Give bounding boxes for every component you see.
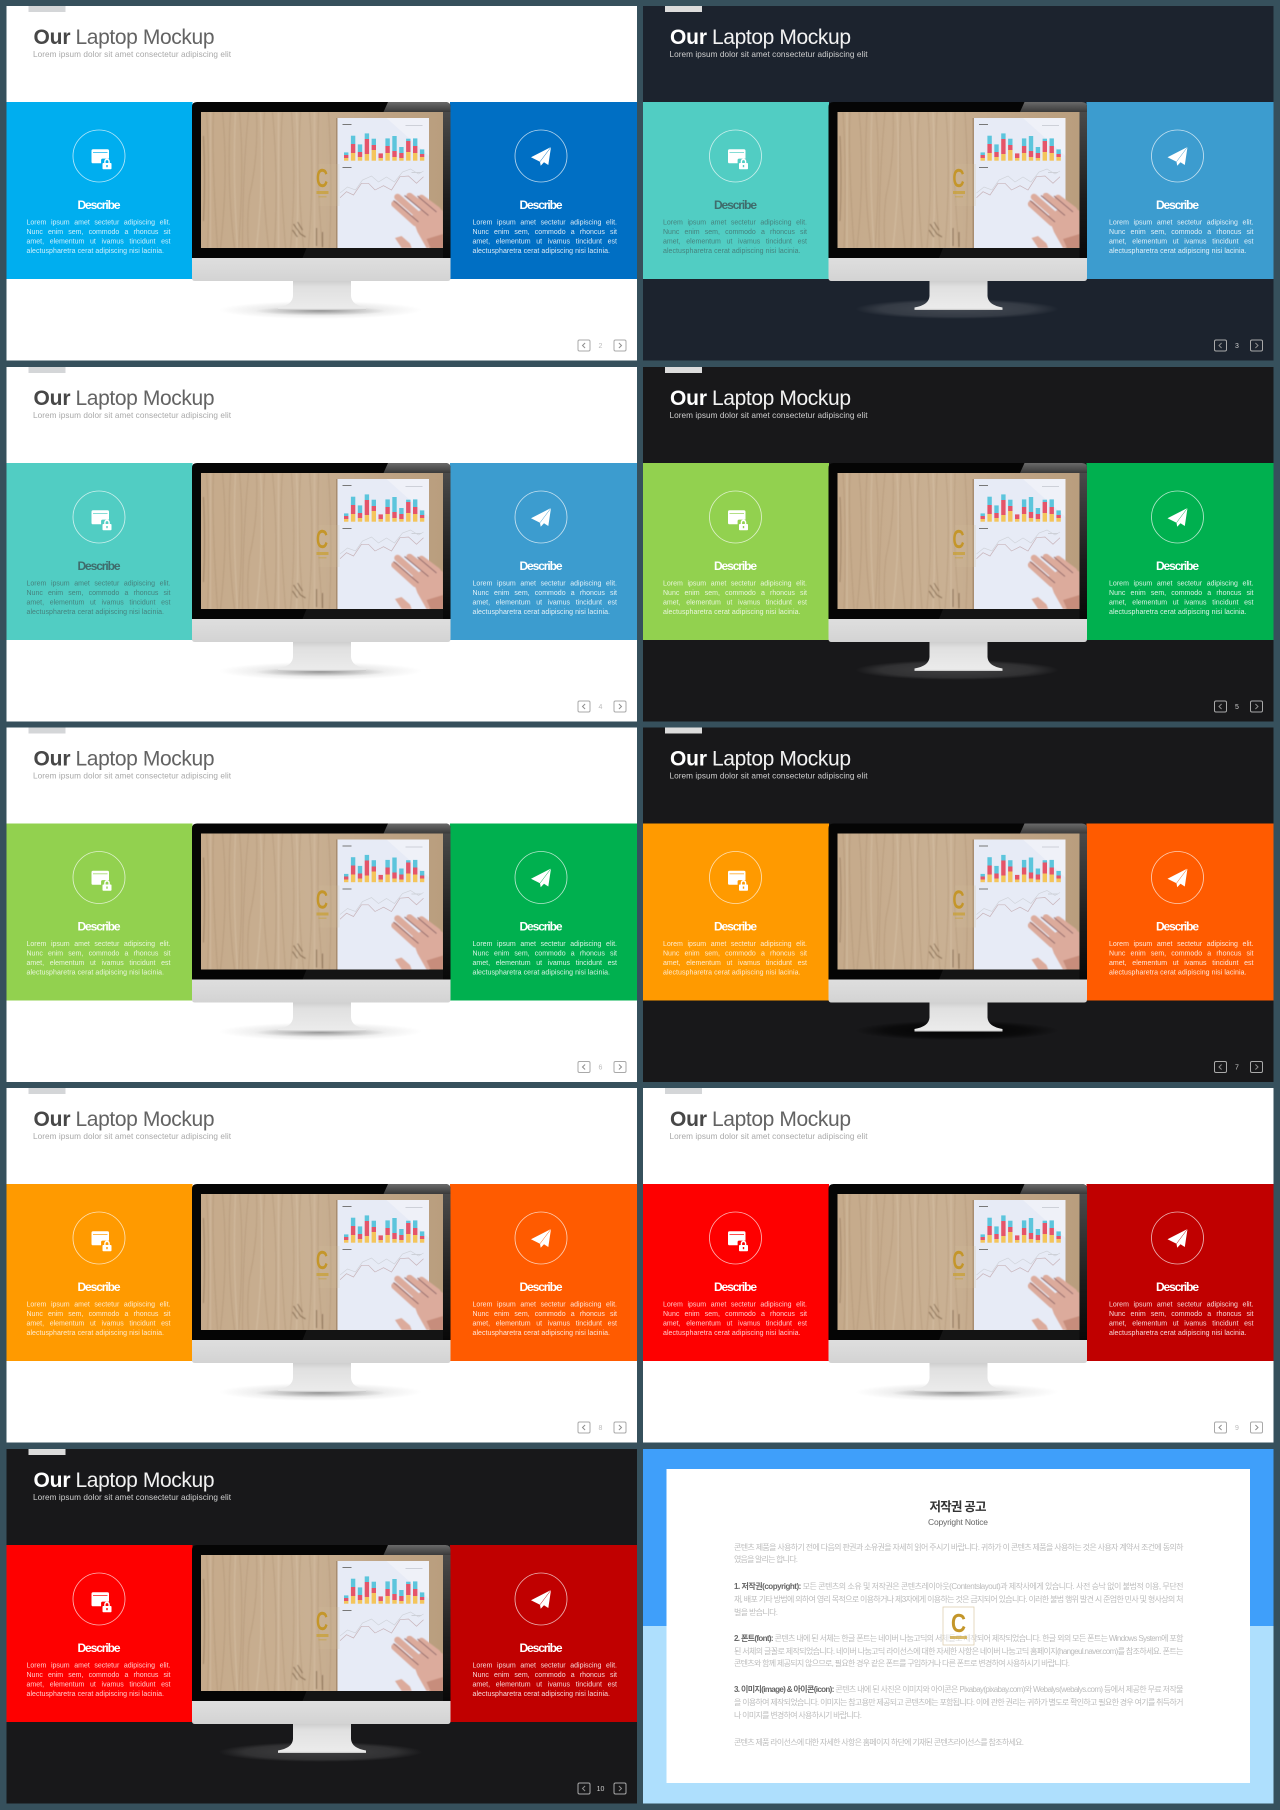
text block: right: alectuspharetra cerat adipiscing nisi lacinia.: [472, 248, 610, 255]
heading: right: Describe: [1156, 1280, 1199, 1294]
text block: right: amet, elementum ut ivamus tincidunt est: [1109, 238, 1254, 246]
text block: right: [1109, 941, 1254, 976]
heading: right: Describe: [520, 920, 563, 934]
text block: left: alectuspharetra cerat adipiscing nisi lacinia.: [663, 970, 801, 976]
text block: right: [472, 1662, 617, 1698]
panel: right: [450, 102, 637, 279]
heading: right: Describe: [1156, 920, 1199, 934]
text block: right: amet, elementum ut ivamus tincidunt est: [472, 1682, 617, 1688]
text block: left: Lorem ipsum amet sectetur adipiscing elit.: [26, 1662, 171, 1670]
text block: right: Lorem ipsum amet sectetur adipiscing elit.: [1109, 941, 1254, 948]
panel: right: [450, 463, 637, 640]
watermark: gold C: [943, 1607, 974, 1645]
title: Laptop Mockup: [712, 748, 851, 770]
panel: left: [6, 824, 192, 1000]
text block: right: amet, elementum ut ivamus tincidunt est: [1109, 1320, 1254, 1328]
pager: [1214, 701, 1262, 712]
text block: section 3 image and icon: 을 이용하여 제작되었습니다. 이미지는 참고용만 제공되고 콘텐츠에는 포함됩니다. 이에 관한 권리는 귀하가 별도로 확인하고 필요한 경우 여기를 취득하거: [734, 1697, 1184, 1707]
text block: left: Lorem ipsum amet sectetur adipiscing elit.: [26, 220, 171, 226]
text block: section 1 copyright: 벌을 받습니다.: [734, 1607, 778, 1617]
text block: right: [472, 220, 617, 255]
text block: section 1 copyright: 재, 배포 기타 방법에 의하여 영리 목적으로 이용하거나 제3자에게 이용하는 것은 금지되어 있습니다. 이러한 불법 행위 발견 시 준엄한 민사 및 형사상의 처: [734, 1594, 1184, 1604]
text block: intro: 였음을 알리는 합니다.: [734, 1554, 798, 1564]
top tab: [28, 367, 66, 373]
pager: 3: [1235, 343, 1239, 350]
monitor mockup: [192, 102, 450, 319]
text block: right: [472, 1302, 617, 1337]
text block: right: Nunc enim sem, commodo a rhoncus sit: [472, 1311, 617, 1318]
panel: left: [6, 463, 192, 640]
text block: left: amet, elementum ut ivamus tincidunt est: [663, 238, 807, 246]
text block: left: alectuspharetra cerat adipiscing nisi lacinia.: [26, 609, 164, 616]
icon: circle with paper plane: [1152, 852, 1204, 904]
icon: circle with paper plane: [515, 130, 567, 182]
pager: [578, 1062, 626, 1072]
text block: left: [26, 1662, 171, 1698]
pager: [1214, 1062, 1262, 1072]
text block: left: alectuspharetra cerat adipiscing nisi lacinia.: [663, 609, 801, 616]
text block: right: amet, elementum ut ivamus tincidunt est: [472, 600, 617, 606]
text block: left: alectuspharetra cerat adipiscing nisi lacinia.: [26, 1691, 164, 1698]
pager: [1214, 1422, 1262, 1433]
icon: circle with browser lock: [73, 491, 125, 543]
heading: left: Describe: [78, 1280, 121, 1294]
monitor mockup: C: [316, 1245, 328, 1275]
slide: page 8 orange on white: [6, 1088, 637, 1442]
text block: left: [663, 220, 807, 255]
panel: left: [643, 1184, 829, 1361]
text block: left: [663, 1302, 807, 1337]
heading: left: Describe: [78, 1641, 121, 1655]
text block: left: Nunc enim sem, commodo a rhoncus sit: [26, 1311, 171, 1318]
text block: section 3 image and icon: [734, 1684, 1184, 1720]
text block: right: Nunc enim sem, commodo a rhoncus sit: [1109, 950, 1254, 958]
text block: section 1 copyright: [734, 1581, 1184, 1617]
text block: right: Nunc enim sem, commodo a rhoncus sit: [472, 229, 617, 236]
text block: right: alectuspharetra cerat adipiscing nisi lacinia.: [1109, 248, 1247, 255]
pager: [1214, 340, 1262, 351]
title: Laptop Mockup: [76, 748, 214, 770]
title: Laptop Mockup: [712, 387, 851, 410]
panel: right: [1086, 1184, 1274, 1361]
subtitle: Lorem ipsum dolor sit amet consectetur adipiscing elit: [670, 50, 868, 59]
monitor mockup: [192, 463, 450, 680]
top tab: [665, 367, 702, 373]
text block: left: Lorem ipsum amet sectetur adipiscing elit.: [26, 580, 171, 588]
pager: 4: [599, 704, 603, 711]
text block: left: alectuspharetra cerat adipiscing nisi lacinia.: [26, 248, 164, 255]
monitor mockup: C: [316, 884, 328, 914]
top tab: [28, 728, 66, 734]
monitor mockup: [828, 102, 1087, 319]
slide: page 5 green on black: [643, 367, 1274, 722]
monitor mockup: [192, 1184, 450, 1401]
heading: copyright title: 저작권 공고: [930, 1499, 986, 1514]
text block: left: Nunc enim sem, commodo a rhoncus sit: [26, 229, 171, 236]
text block: left: [663, 941, 807, 976]
top tab: [665, 728, 702, 734]
panel: right: [450, 824, 637, 1000]
icon: circle with browser lock: [710, 130, 762, 182]
title: Our: [34, 1108, 70, 1131]
title: Our: [34, 387, 70, 410]
heading: left: Describe: [714, 198, 757, 212]
text block: right: Lorem ipsum amet sectetur adipiscing elit.: [472, 1302, 617, 1308]
slide: page 9 red on white: [643, 1088, 1274, 1442]
text block: left: Nunc enim sem, commodo a rhoncus sit: [663, 1311, 807, 1318]
slide: page 7 orange on black: [643, 728, 1274, 1082]
icon: circle with browser lock: [710, 1212, 762, 1264]
title: Our: [34, 1469, 70, 1492]
panel: right: [450, 1184, 637, 1361]
text block: right: alectuspharetra cerat adipiscing nisi lacinia.: [472, 970, 610, 976]
heading: right: Describe: [520, 198, 563, 212]
text block: section 2 font: 2. 폰트(font): 콘텐츠 내에 된 서체는 한글 폰트는 네이버 나눔고딕의 서체들로 제작되어 제작되었습니다. 한글 외의 모든 폰트는 Windows System에 포함: [734, 1633, 1184, 1643]
monitor mockup: C: [952, 1245, 965, 1275]
panel: left: [643, 102, 829, 279]
subtitle: Lorem ipsum dolor sit amet consectetur adipiscing elit: [670, 772, 868, 780]
text block: right: [1109, 1302, 1254, 1337]
subheading: copyright notice: Copyright Notice: [928, 1517, 988, 1527]
panel: right: [450, 1545, 637, 1722]
heading: left: Describe: [78, 920, 121, 934]
slide: page 3 teal on navy: [643, 6, 1274, 360]
top tab: [665, 6, 702, 12]
monitor mockup: C: [316, 1606, 328, 1636]
text block: right: Nunc enim sem, commodo a rhoncus sit: [1109, 1311, 1254, 1318]
subtitle: Lorem ipsum dolor sit amet consectetur adipiscing elit: [33, 1493, 232, 1502]
monitor mockup: C: [316, 163, 328, 193]
title: Laptop Mockup: [76, 387, 214, 410]
top tab: [28, 1088, 66, 1094]
panel: left: [6, 102, 192, 279]
top tab: [28, 1449, 66, 1455]
text block: left: amet, elementum ut ivamus tincidunt est: [26, 1682, 171, 1688]
slide: page 10 red on black: [6, 1449, 637, 1804]
subtitle: Lorem ipsum dolor sit amet consectetur adipiscing elit: [33, 50, 232, 59]
panel: copyright notice: [643, 1449, 1274, 1804]
text block: right: Lorem ipsum amet sectetur adipiscing elit.: [472, 1662, 617, 1670]
text block: right: alectuspharetra cerat adipiscing nisi lacinia.: [472, 609, 610, 616]
text block: left: Nunc enim sem, commodo a rhoncus sit: [663, 950, 807, 958]
top tab: [665, 1088, 702, 1094]
title: Laptop Mockup: [712, 26, 851, 49]
text block: right: amet, elementum ut ivamus tincidunt est: [472, 238, 617, 246]
text block: left: amet, elementum ut ivamus tincidunt est: [663, 1320, 807, 1328]
icon: circle with paper plane: [1152, 1212, 1204, 1264]
heading: left: Describe: [78, 559, 121, 573]
title: Our: [670, 26, 707, 49]
text block: section 2 font: 콘텐츠와 함께 제공되지 않으므로, 필요한 경우 같은 폰트를 구입하거나 다른 폰트로 변경하여 사용하시기 바랍니다.: [734, 1658, 1070, 1668]
monitor mockup: C: [952, 884, 965, 914]
text block: intro: [734, 1542, 1184, 1564]
text block: left: Lorem ipsum amet sectetur adipiscing elit.: [26, 941, 171, 948]
text block: right: Nunc enim sem, commodo a rhoncus sit: [472, 950, 617, 958]
text block: right: [1109, 220, 1254, 255]
text block: left: amet, elementum ut ivamus tincidunt est: [26, 1320, 171, 1328]
title: Laptop Mockup: [76, 1469, 214, 1492]
heading: left: Describe: [78, 198, 121, 212]
icon: circle with browser lock: [73, 130, 125, 182]
text block: right: Nunc enim sem, commodo a rhoncus sit: [1109, 229, 1254, 236]
text block: section 2 font: [734, 1633, 1184, 1668]
text block: right: Lorem ipsum amet sectetur adipiscing elit.: [472, 220, 617, 226]
pager: 5: [1235, 704, 1239, 711]
text block: right: Nunc enim sem, commodo a rhoncus sit: [1109, 590, 1254, 597]
text block: left: [663, 580, 807, 616]
text block: left: amet, elementum ut ivamus tincidunt est: [26, 600, 171, 606]
icon: circle with paper plane: [515, 1573, 567, 1625]
pager: 7: [1235, 1064, 1239, 1072]
pager: 10: [597, 1786, 604, 1793]
text block: section 3 image and icon: 3. 이미지(image) & 아이콘(icon): 콘텐츠 내에 된 사진은 이미지와 아이콘은 Pixabay(pixabay.com)와 Webalys(webalys.com) 등에서 제공한 무료 저작물: [734, 1684, 1184, 1694]
heading: right: Describe: [1156, 559, 1199, 573]
subtitle: Lorem ipsum dolor sit amet consectetur adipiscing elit: [33, 1132, 232, 1141]
monitor mockup: C: [316, 524, 328, 554]
text block: license footer: 콘텐츠 제품 라이선스에 대한 자세한 사항은 홈페이지 하단에 기재된 콘텐츠라이선스를 참조하세요.: [734, 1737, 1024, 1747]
monitor mockup: [192, 824, 450, 1040]
icon: circle with paper plane: [515, 852, 567, 904]
heading: right: Describe: [520, 1280, 563, 1294]
slide: page 4 teal on white: [6, 367, 637, 722]
text block: left: amet, elementum ut ivamus tincidunt est: [26, 238, 171, 246]
text block: left: Lorem ipsum amet sectetur adipiscing elit.: [663, 220, 807, 226]
heading: right: Describe: [520, 1641, 563, 1655]
watermark: gold C: C: [951, 1608, 966, 1638]
heading: right: Describe: [1156, 198, 1199, 212]
text block: left: amet, elementum ut ivamus tincidunt est: [26, 960, 171, 967]
monitor mockup: C: [952, 163, 965, 193]
title: Our: [670, 387, 707, 410]
text block: right: alectuspharetra cerat adipiscing nisi lacinia.: [1109, 970, 1247, 976]
icon: circle with paper plane: [515, 1212, 567, 1264]
text block: right: [472, 580, 617, 616]
text block: right: amet, elementum ut ivamus tincidunt est: [472, 1320, 617, 1328]
panel: left: [643, 824, 829, 1000]
text block: left: amet, elementum ut ivamus tincidunt est: [663, 600, 807, 606]
panel: right: [1086, 463, 1274, 640]
text block: left: Lorem ipsum amet sectetur adipiscing elit.: [663, 941, 807, 948]
title: Laptop Mockup: [76, 26, 214, 49]
monitor mockup: [828, 824, 1087, 1040]
subtitle: Lorem ipsum dolor sit amet consectetur adipiscing elit: [33, 411, 232, 420]
text block: left: [26, 941, 171, 976]
subtitle: Lorem ipsum dolor sit amet consectetur adipiscing elit: [670, 411, 868, 420]
pager: [578, 1783, 626, 1794]
pager: 6: [599, 1064, 603, 1072]
text block: section 2 font: 된 서체의 글꼴로 제작되었습니다. 네이버 나눔고딕 라이선스에 대한 자세한 사항은 네이버 나눔고딕 홈페이지(hangeul.naver.com)를 참조하세요. 폰트는: [734, 1646, 1184, 1656]
text block: left: Lorem ipsum amet sectetur adipiscing elit.: [663, 580, 807, 588]
heading: right: Describe: [520, 559, 563, 573]
text block: left: Lorem ipsum amet sectetur adipiscing elit.: [26, 1302, 171, 1308]
text block: section 1 copyright: 1. 저작권(copyright): 모든 콘텐츠의 소유 및 저작권은 콘텐츠레이아웃(Contentslayout)과 제작사에게 있습니다. 사전 승낙 없이 불법적 이용, 무단전: [734, 1581, 1184, 1591]
panel: left: [6, 1184, 192, 1361]
icon: circle with paper plane: [1152, 130, 1204, 182]
text block: left: Lorem ipsum amet sectetur adipiscing elit.: [663, 1302, 807, 1308]
text block: right: alectuspharetra cerat adipiscing nisi lacinia.: [472, 1691, 610, 1698]
pager: [578, 701, 626, 712]
text block: right: Lorem ipsum amet sectetur adipiscing elit.: [1109, 580, 1254, 588]
top tab: [28, 6, 66, 12]
text block: left: alectuspharetra cerat adipiscing nisi lacinia.: [26, 1330, 164, 1337]
text block: right: amet, elementum ut ivamus tincidunt est: [1109, 960, 1254, 967]
subtitle: Lorem ipsum dolor sit amet consectetur adipiscing elit: [33, 772, 232, 780]
text block: right: [472, 941, 617, 976]
pager: [578, 340, 626, 351]
monitor mockup: [192, 1545, 450, 1762]
monitor mockup: [828, 463, 1087, 680]
text block: left: Nunc enim sem, commodo a rhoncus sit: [26, 950, 171, 958]
text block: right: amet, elementum ut ivamus tincidunt est: [472, 960, 617, 967]
text block: left: [26, 580, 171, 616]
text block: left: alectuspharetra cerat adipiscing nisi lacinia.: [663, 1330, 801, 1337]
text block: right: alectuspharetra cerat adipiscing nisi lacinia.: [1109, 1330, 1247, 1337]
panel: right: [1086, 824, 1274, 1000]
panel: left: [643, 463, 829, 640]
title: Laptop Mockup: [76, 1108, 214, 1131]
text block: left: Nunc enim sem, commodo a rhoncus sit: [26, 1672, 171, 1679]
heading: left: Describe: [714, 1280, 757, 1294]
text block: left: [26, 1302, 171, 1337]
pager: 2: [599, 343, 603, 350]
icon: circle with browser lock: [73, 1573, 125, 1625]
text block: right: Lorem ipsum amet sectetur adipiscing elit.: [1109, 1302, 1254, 1308]
panel: left: [6, 1545, 192, 1722]
text block: right: [1109, 580, 1254, 616]
pager: 9: [1235, 1425, 1239, 1432]
icon: circle with browser lock: [710, 491, 762, 543]
text block: intro: 콘텐츠 제품을 사용하기 전에 다음의 판권과 소유권을 자세히 읽어 주시기 바랍니다. 귀하가 이 콘텐츠 제품을 사용하는 것은 사용자 계약서 조건에 동의하: [734, 1542, 1184, 1552]
text block: left: amet, elementum ut ivamus tincidunt est: [663, 960, 807, 967]
monitor mockup: [828, 1184, 1087, 1401]
text block: right: Nunc enim sem, commodo a rhoncus sit: [472, 590, 617, 597]
monitor mockup: C: [952, 524, 965, 554]
text block: left: Nunc enim sem, commodo a rhoncus sit: [663, 229, 807, 236]
text block: right: Lorem ipsum amet sectetur adipiscing elit.: [472, 580, 617, 588]
pager: 8: [599, 1425, 603, 1432]
icon: circle with browser lock: [73, 852, 125, 904]
text block: right: Nunc enim sem, commodo a rhoncus sit: [472, 1672, 617, 1679]
pager: [578, 1422, 626, 1433]
text block: right: Lorem ipsum amet sectetur adipiscing elit.: [1109, 220, 1254, 226]
title: Our: [34, 748, 70, 770]
title: Our: [34, 26, 70, 49]
text block: right: alectuspharetra cerat adipiscing nisi lacinia.: [472, 1330, 610, 1337]
text block: left: alectuspharetra cerat adipiscing nisi lacinia.: [663, 248, 801, 255]
heading: left: Describe: [714, 920, 757, 934]
text block: left: [26, 220, 171, 255]
heading: left: Describe: [714, 559, 757, 573]
text block: right: amet, elementum ut ivamus tincidunt est: [1109, 600, 1254, 606]
slide: page 2 blue on white: [6, 6, 637, 360]
slide: page 6 green on white: [6, 728, 637, 1082]
icon: circle with paper plane: [515, 491, 567, 543]
title: Our: [670, 1108, 707, 1131]
icon: circle with paper plane: [1152, 491, 1204, 543]
title: Laptop Mockup: [712, 1108, 851, 1131]
text block: left: alectuspharetra cerat adipiscing nisi lacinia.: [26, 970, 164, 976]
icon: circle with browser lock: [73, 1212, 125, 1264]
text block: left: Nunc enim sem, commodo a rhoncus sit: [26, 590, 171, 597]
text block: right: Lorem ipsum amet sectetur adipiscing elit.: [472, 941, 617, 948]
text block: right: alectuspharetra cerat adipiscing nisi lacinia.: [1109, 609, 1247, 616]
panel: right: [1086, 102, 1274, 279]
text block: left: Nunc enim sem, commodo a rhoncus sit: [663, 590, 807, 597]
text block: section 3 image and icon: 나 이미지를 변경하여 사용하시기 바랍니다.: [734, 1710, 862, 1720]
subtitle: Lorem ipsum dolor sit amet consectetur adipiscing elit: [670, 1132, 868, 1141]
title: Our: [670, 748, 707, 770]
icon: circle with browser lock: [710, 852, 762, 904]
